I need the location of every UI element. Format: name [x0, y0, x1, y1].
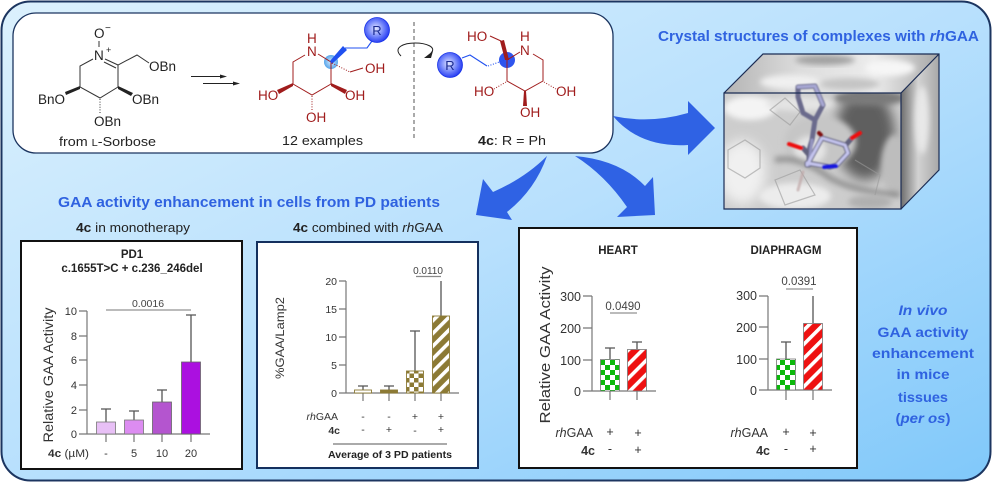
- structure: 12 examples: R: [372, 23, 382, 38]
- tick labels: 15: [325, 304, 337, 316]
- chart: heart: +: [634, 443, 642, 457]
- structure: compound 4c: N: [520, 43, 530, 58]
- significance: 0.0016: [132, 298, 164, 310]
- panel: mouse tissue bar charts: [519, 228, 857, 468]
- x axis labels: [48, 448, 197, 460]
- chart: diaphragm: 4c: [756, 444, 770, 458]
- structure: nitrone precursor from L-sorbose: OBn: [132, 92, 159, 107]
- structure: nitrone precursor from L-sorbose: N: [94, 48, 104, 63]
- significance: 0.0110: [413, 266, 443, 277]
- treatment labels: -: [361, 411, 365, 423]
- structure: nitrone precursor from L-sorbose: OBn: [149, 59, 176, 74]
- tick labels: 6: [71, 355, 77, 367]
- chart: heart: HEART: [598, 245, 638, 257]
- arrow: to crystal structure: [613, 101, 715, 155]
- treatment labels: +: [386, 424, 392, 436]
- tick labels: [325, 276, 337, 400]
- tick labels: 20: [325, 276, 337, 288]
- y axis title: Relative GAA Activity: [41, 307, 56, 442]
- bars with error bars: [354, 281, 450, 393]
- structure: nitrone precursor from L-sorbose: −: [105, 23, 111, 34]
- chart: diaphragm: DIAPHRAGM: [751, 245, 821, 257]
- treatment labels: -: [413, 425, 417, 437]
- tick labels: 5: [331, 360, 337, 372]
- structure: 12 examples: OH: [365, 61, 385, 76]
- treatment labels: +: [438, 424, 444, 436]
- arrow: to mouse tissue assays: [575, 156, 655, 217]
- panel: combination bar chart: [257, 242, 478, 468]
- treatment labels: rhGAA: [306, 411, 338, 423]
- chart: heart: +: [606, 425, 614, 439]
- tick labels: [65, 306, 77, 441]
- heading: crystal structures: Crystal structures of complexes with rhGAA: [658, 29, 980, 45]
- chart: diaphragm: 100: [736, 353, 757, 367]
- text: in vivo caption: in mice: [896, 366, 950, 382]
- structure: compound 4c: H: [520, 29, 530, 44]
- chart: diaphragm: [730, 245, 832, 458]
- ligand stick model: [789, 86, 860, 190]
- structure: 12 examples: N: [307, 44, 317, 59]
- tick labels: 8: [71, 331, 77, 343]
- structure: compound 4c: HO: [474, 84, 494, 99]
- structure: compound 4c: HO: [467, 29, 487, 44]
- chart: heart: 4c: [581, 444, 595, 458]
- tick labels: 4: [71, 380, 77, 392]
- tick labels: 10: [325, 332, 337, 344]
- chart title: c.1655T>C + c.236_246del: [61, 263, 203, 275]
- structure: 12 examples: HO: [258, 88, 278, 103]
- structure: compound 4c: OH: [520, 105, 540, 120]
- chart: diaphragm: -: [784, 442, 788, 456]
- chart: heart: 300: [560, 290, 581, 304]
- chart: diaphragm: +: [782, 425, 790, 439]
- structure: 12 examples: [258, 18, 390, 148]
- structure: compound 4c: OH: [556, 84, 576, 99]
- chart: diaphragm: 0: [750, 384, 757, 398]
- crystal structure cube: [718, 54, 939, 209]
- tick labels: 10: [65, 306, 77, 318]
- structure: nitrone precursor from L-sorbose: from L-Sorbose: [59, 134, 156, 149]
- arrow: to cell assays: [476, 156, 547, 220]
- treatment labels: 4c: [328, 425, 340, 437]
- treatment labels: [306, 411, 444, 437]
- cube top face: [724, 54, 939, 93]
- axes: [79, 311, 210, 442]
- chart: heart: -: [608, 442, 612, 456]
- arrows: two-step synthesis: [191, 74, 240, 86]
- structure: compound 4c: [438, 29, 576, 148]
- subheading: combination: 4c combined with rhGAA: [293, 220, 443, 235]
- tick labels: 0: [71, 429, 77, 441]
- structure: nitrone precursor from L-sorbose: [38, 23, 176, 149]
- tick labels: 0: [331, 388, 337, 400]
- chart title: PD1: [121, 249, 143, 261]
- y axis title: %GAA/Lamp2: [273, 297, 287, 379]
- text: in vivo caption: In vivo: [898, 302, 948, 318]
- x axis labels: -: [104, 448, 108, 460]
- text: in vivo caption: tissues: [898, 389, 948, 405]
- chart: diaphragm: 0.0391: [781, 276, 817, 288]
- chart: heart: +: [634, 426, 642, 440]
- patients note: [328, 444, 452, 461]
- structure: 12 examples: 12 examples: [282, 133, 364, 148]
- panel: chemistry structures: [13, 13, 613, 153]
- treatment labels: -: [361, 424, 365, 436]
- bars with error bars: [96, 315, 200, 434]
- heading: cell assays: GAA activity enhancement in cells from PD patients: [58, 195, 440, 211]
- treatment labels: +: [412, 411, 418, 423]
- chart: heart: 200: [560, 322, 581, 336]
- cube right face: [901, 54, 939, 209]
- structure: 12 examples: OH: [345, 88, 365, 103]
- chart: heart: [555, 245, 656, 458]
- treatment labels: -: [387, 411, 391, 423]
- structure: 12 examples: H: [307, 31, 317, 46]
- chart: diaphragm: +: [809, 426, 817, 440]
- chart: diaphragm: 300: [736, 289, 757, 303]
- structure: nitrone precursor from L-sorbose: OBn: [94, 114, 121, 129]
- x axis labels: 20: [185, 448, 197, 460]
- chart: heart: 0.0490: [605, 301, 641, 313]
- chart: diaphragm: 200: [736, 321, 757, 335]
- treatment labels: +: [438, 411, 444, 423]
- panel: PD1 bar chart: [21, 241, 242, 469]
- divider with rotation arrow: [398, 22, 433, 141]
- significance: [106, 298, 191, 310]
- structure: nitrone precursor from L-sorbose: O: [94, 26, 105, 41]
- chart: diaphragm: +: [809, 442, 817, 456]
- text: in vivo caption: GAA activity: [878, 324, 969, 340]
- text: in vivo caption: [872, 302, 974, 426]
- cube edges: [724, 54, 939, 209]
- cube front face: protein surface: [724, 94, 900, 208]
- text: in vivo caption: enhancement: [872, 345, 974, 361]
- structure: compound 4c: 4c: R = Ph: [478, 133, 546, 148]
- y axis title: Relative GAA Activity: [538, 266, 554, 424]
- structure: nitrone precursor from L-sorbose: +: [106, 45, 111, 55]
- axes: [339, 281, 459, 401]
- structure: 12 examples: OH: [306, 110, 326, 125]
- structure: nitrone precursor from L-sorbose: BnO: [38, 92, 65, 107]
- chart: diaphragm: rhGAA: [730, 426, 769, 440]
- chart: heart: rhGAA: [555, 426, 594, 440]
- x axis labels: 4c (µM): [48, 448, 89, 460]
- x axis labels: 10: [156, 448, 168, 460]
- subheading: monotherapy: 4c in monotherapy: [76, 220, 191, 235]
- text: in vivo caption: (per os): [896, 410, 950, 426]
- structure: compound 4c: R: [445, 58, 455, 73]
- tick labels: 2: [71, 405, 77, 417]
- patients note: Average of 3 PD patients: [328, 450, 452, 461]
- chart: heart: 0: [574, 385, 581, 399]
- chart: heart: 100: [560, 354, 581, 368]
- x axis labels: 5: [131, 448, 137, 460]
